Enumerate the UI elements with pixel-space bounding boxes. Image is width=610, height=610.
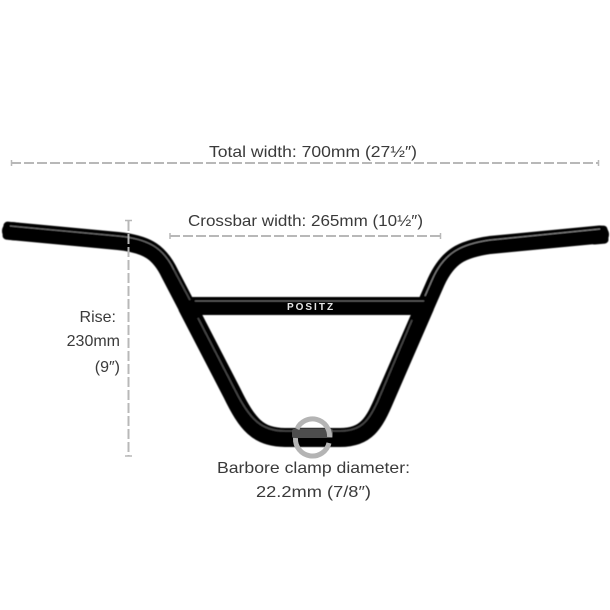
clamp diameter marker: [292, 419, 333, 456]
label: clamp diameter: [217, 460, 410, 501]
label: rise: [67, 309, 120, 376]
handlebar: [2, 221, 609, 438]
label: rise: 230mm: [67, 333, 120, 350]
label: rise: (9″): [95, 359, 120, 376]
total width dimension line: [11, 160, 599, 166]
label: crossbar width: Crossbar width: 265mm (10½″): [188, 213, 423, 230]
brand logo: POSITZ: [287, 302, 335, 313]
label: clamp diameter: 22.2mm (7/8″): [256, 484, 371, 501]
crossbar width dimension line: [170, 233, 440, 239]
rise dimension line: [125, 220, 132, 456]
label: clamp diameter: Barbore clamp diameter:: [217, 460, 410, 477]
label: rise: Rise:: [80, 309, 116, 326]
label: total width: Total width: 700mm (27½″): [209, 144, 417, 161]
